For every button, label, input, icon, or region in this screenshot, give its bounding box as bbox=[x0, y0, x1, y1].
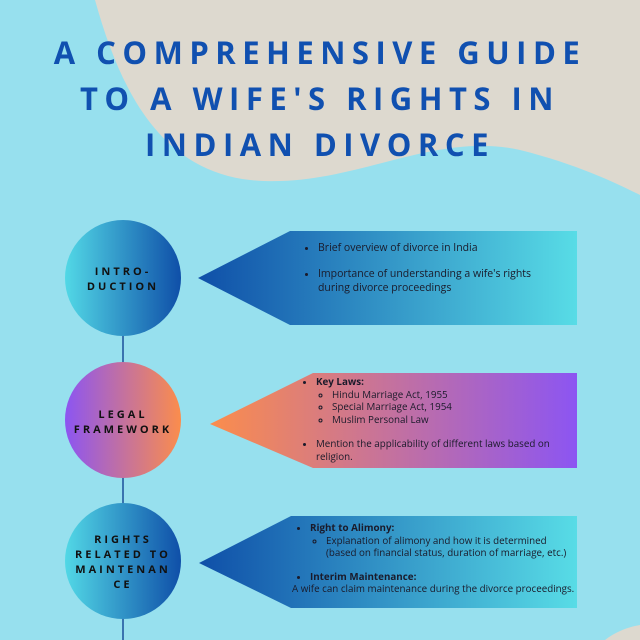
panel text: legal framework: Muslim Personal Law bbox=[332, 412, 429, 426]
panel: legal framework bbox=[210, 373, 577, 468]
circle label: maintenance: CE bbox=[113, 577, 133, 592]
panel text: legal framework: Hindu Marriage Act, 1955 bbox=[332, 388, 448, 400]
circle label: legal framework: LEGAL bbox=[98, 407, 148, 422]
title: INDIAN DIVORCE bbox=[145, 124, 495, 166]
circle: introduction bbox=[65, 220, 181, 336]
circle: maintenance bbox=[65, 503, 181, 619]
circle label: maintenance: RIGHTS bbox=[94, 532, 152, 547]
panel text: legal framework: Key Laws: bbox=[316, 375, 364, 388]
circle label: maintenance: MAINTENAN bbox=[75, 562, 171, 577]
circle label: introduction bbox=[87, 264, 159, 294]
panel text: maintenance bbox=[292, 521, 574, 595]
panel text: maintenance: (based on financial status, duration of marriage, etc.) bbox=[326, 546, 566, 559]
circle label: introduction: DUCTION bbox=[87, 279, 159, 294]
panel: maintenance bbox=[199, 516, 577, 608]
panel text: legal framework: Special Marriage Act, 1954 bbox=[332, 400, 452, 413]
circle label: legal framework: FRAMEWORK bbox=[74, 422, 172, 437]
panel text: maintenance: A wife can claim maintenance during the divorce proceedings. bbox=[292, 582, 574, 595]
circle label: maintenance bbox=[75, 532, 171, 592]
circle label: maintenance: RELATED TO bbox=[75, 547, 171, 562]
circle label: legal framework bbox=[74, 407, 172, 437]
title: TO A WIFE'S RIGHTS IN bbox=[80, 78, 560, 120]
panel text: maintenance: Explanation of alimony and how it is determined bbox=[326, 534, 547, 546]
circle label: introduction: INTRO- bbox=[95, 264, 151, 279]
panel: introduction bbox=[198, 231, 577, 325]
panel text: legal framework bbox=[303, 375, 550, 462]
panel text: introduction bbox=[305, 241, 531, 295]
title bbox=[54, 32, 586, 166]
panel text: introduction: Importance of understanding a wife's rights during divorce proceedings bbox=[318, 267, 531, 295]
panel text: introduction: Brief overview of divorce in India bbox=[318, 241, 478, 255]
panel text: maintenance: Interim Maintenance: bbox=[310, 570, 416, 582]
title: A COMPREHENSIVE GUIDE bbox=[54, 32, 586, 74]
circle: legal framework bbox=[65, 362, 181, 478]
panel text: legal framework: Mention the applicability of different laws based on religion. bbox=[316, 437, 550, 462]
panel text: maintenance: Right to Alimony: bbox=[310, 521, 394, 534]
